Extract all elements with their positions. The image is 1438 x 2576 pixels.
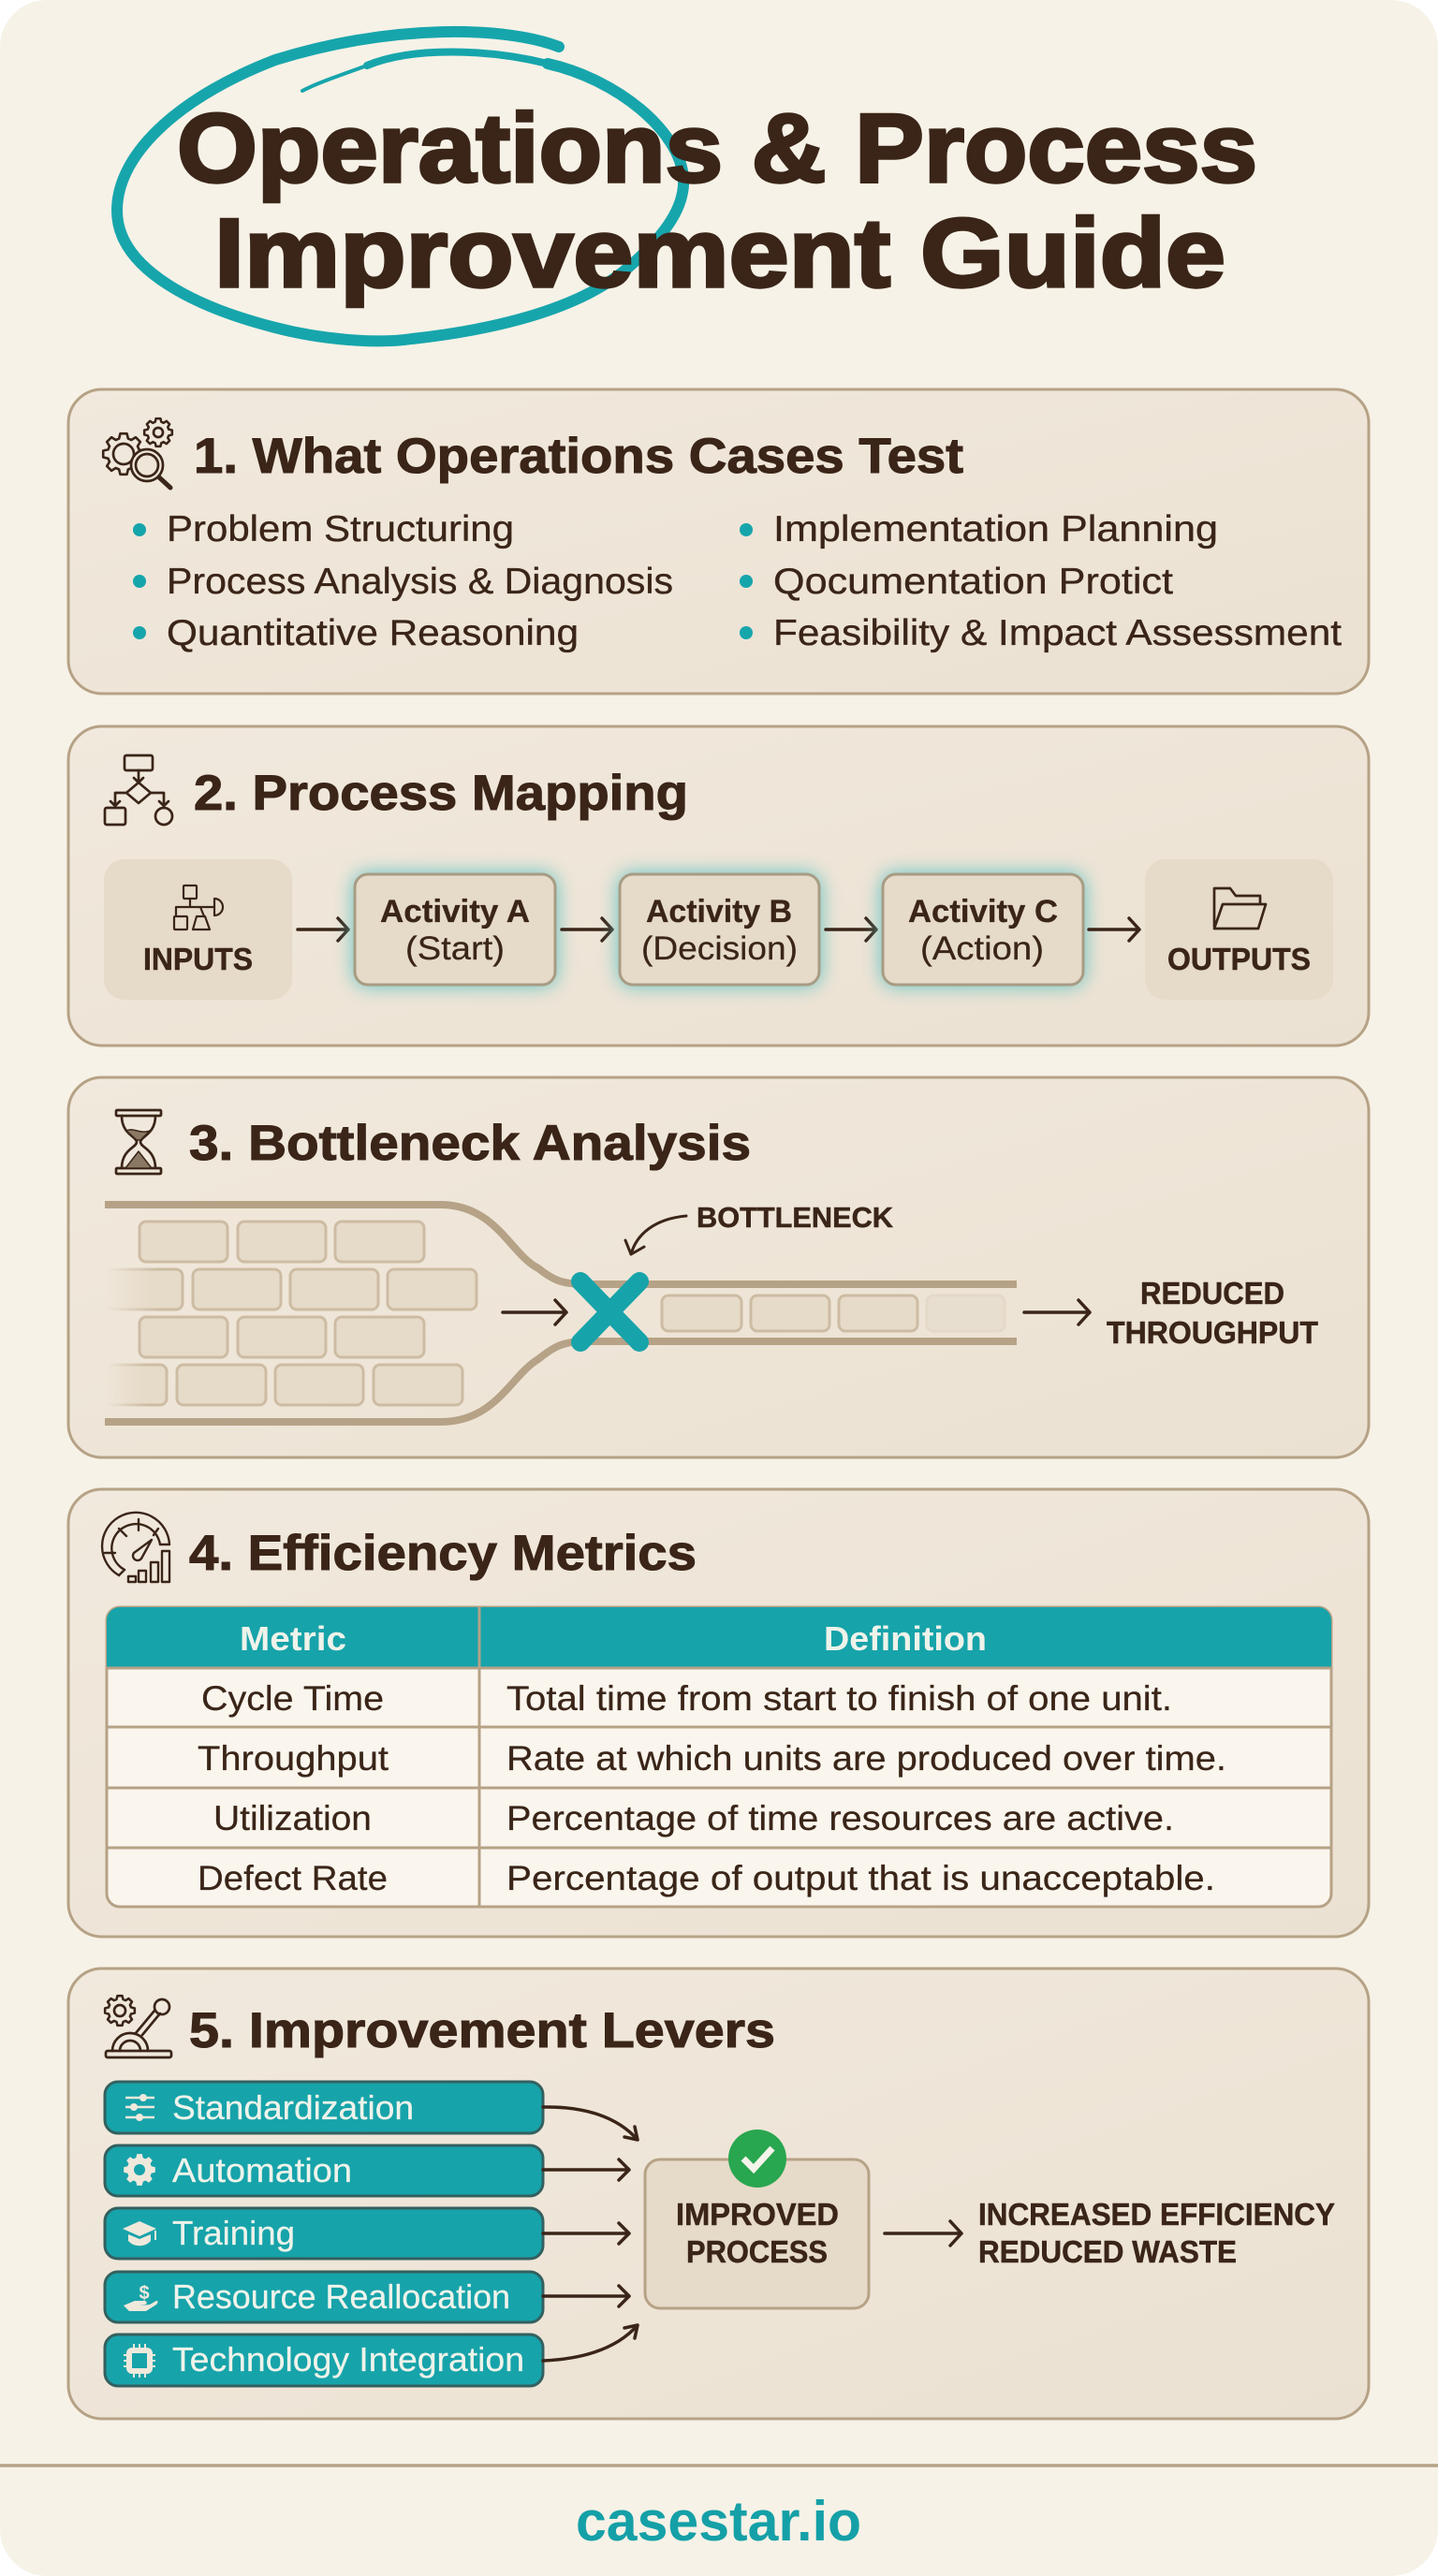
table rows: Utilization [213,1799,372,1837]
improved process box [645,2130,869,2308]
lever: automation: Automation [172,2151,352,2189]
table rows: Percentage of output that is unacceptable. [506,1859,1215,1897]
improved process box: IMPROVED [676,2197,839,2232]
table rows: Total time from start to finish of one unit. [506,1679,1172,1718]
metrics table [107,1607,1331,1907]
funnel channel [105,1205,1017,1422]
panel 3: bottleneck analysis [68,1077,1369,1457]
title text: Improvement Guide [214,199,1225,308]
bottleneck X mark [580,1281,639,1342]
lever: technology integration: Technology Integration [172,2340,524,2378]
icon: gauge and bars [102,1513,169,1582]
table rows [198,1679,1226,1897]
lever: standardization [105,2082,543,2133]
activity A [355,874,555,985]
outcome labels: INCREASED EFFICIENCY [978,2197,1335,2232]
panel 4: efficiency metrics [68,1489,1369,1937]
arrow [826,918,876,941]
panel 2: process mapping [68,726,1369,1046]
title text [177,95,1257,308]
outcome labels [978,2197,1335,2269]
table rows: Defect Rate [198,1859,388,1897]
table rows: Throughput [198,1739,389,1778]
table header [240,1619,987,1658]
arrow to outcome [885,2221,961,2246]
reduced throughput label [1107,1276,1318,1350]
icon: gear [124,2154,155,2186]
activity A: (Start) [405,930,505,967]
queued work blocks [107,1222,477,1405]
outcome labels: REDUCED WASTE [978,2234,1237,2269]
heading: 4. Efficiency Metrics [189,1526,697,1581]
arrow out [1024,1300,1090,1325]
panel 1: what operations cases test [68,389,1369,694]
bottleneck callout [625,1201,894,1254]
icon: hand with coin: $ [139,2283,150,2304]
activity B [620,874,819,985]
icon: flowchart [105,755,172,825]
icon: green check badge [728,2130,786,2188]
panel 5: improvement levers [68,1969,1369,2419]
bullet list: right: Implementation Planning [773,509,1218,549]
bullet list: right [740,509,1342,653]
icon: folder [1214,888,1266,929]
activity C: (Action) [920,930,1044,967]
icon: sliders [125,2094,154,2121]
lever: automation [105,2145,543,2196]
bullet list: left [133,509,673,653]
lever: training: Training [172,2214,295,2252]
activity B: (Decision) [641,930,798,967]
icon: inputs [174,886,223,929]
title text: Operations & Process [177,95,1257,203]
brand name: casestar.io [576,2490,861,2553]
table rows: Cycle Time [201,1679,384,1718]
icon: hourglass [116,1110,161,1174]
bullet list: left: Process Analysis & Diagnosis [167,562,673,602]
arrow [1089,918,1139,941]
lever: resource reallocation: Resource Reallocation [172,2277,510,2316]
reduced throughput label: REDUCED [1140,1276,1284,1310]
activity C [883,874,1083,985]
bullet list: left: Problem Structuring [167,509,514,549]
title with teal hand-drawn circle [117,32,1257,341]
blocks through narrow channel [662,1295,1005,1331]
heading: 5. Improvement Levers [189,2003,775,2058]
icon: graduation cap [123,2221,156,2246]
icon: gears and magnifier [103,418,172,488]
outputs box [1145,859,1333,1000]
bullet list: right: Feasibility & Impact Assessment [773,613,1342,653]
inputs box: INPUTS [143,942,253,976]
activity C: Activity C [908,894,1058,929]
icon: chip [124,2344,155,2378]
arrows to improved process [543,2107,638,2361]
table header: Metric [240,1619,346,1658]
icon: hand with coin [124,2283,158,2311]
arrow [562,918,612,941]
lever: standardization: Standardization [172,2088,414,2127]
bullet list: left: Quantitative Reasoning [167,613,579,653]
activity B: Activity B [646,894,792,929]
inputs box [104,859,292,1000]
arrow into bottleneck [503,1300,566,1325]
table rows: Percentage of time resources are active. [506,1799,1174,1837]
improved process box: PROCESS [686,2234,828,2269]
heading: 2. Process Mapping [194,766,688,821]
table header: Definition [824,1619,987,1658]
reduced throughput label: THROUGHPUT [1107,1315,1318,1350]
outputs box: OUTPUTS [1167,942,1311,976]
table rows: Rate at which units are produced over time. [506,1739,1226,1778]
bottleneck callout: BOTTLENECK [697,1201,894,1234]
bullet list: right: Qocumentation Protict [773,562,1173,602]
heading: 1. What Operations Cases Test [194,429,963,484]
hand-drawn circle [117,32,683,341]
lever: training [105,2208,543,2259]
arrow [298,918,348,941]
lever: technology integration [105,2334,543,2386]
icon: lever and gear [105,1996,171,2057]
lever: resource reallocation [105,2272,543,2322]
activity A: Activity A [380,894,530,929]
heading: 3. Bottleneck Analysis [189,1116,751,1171]
